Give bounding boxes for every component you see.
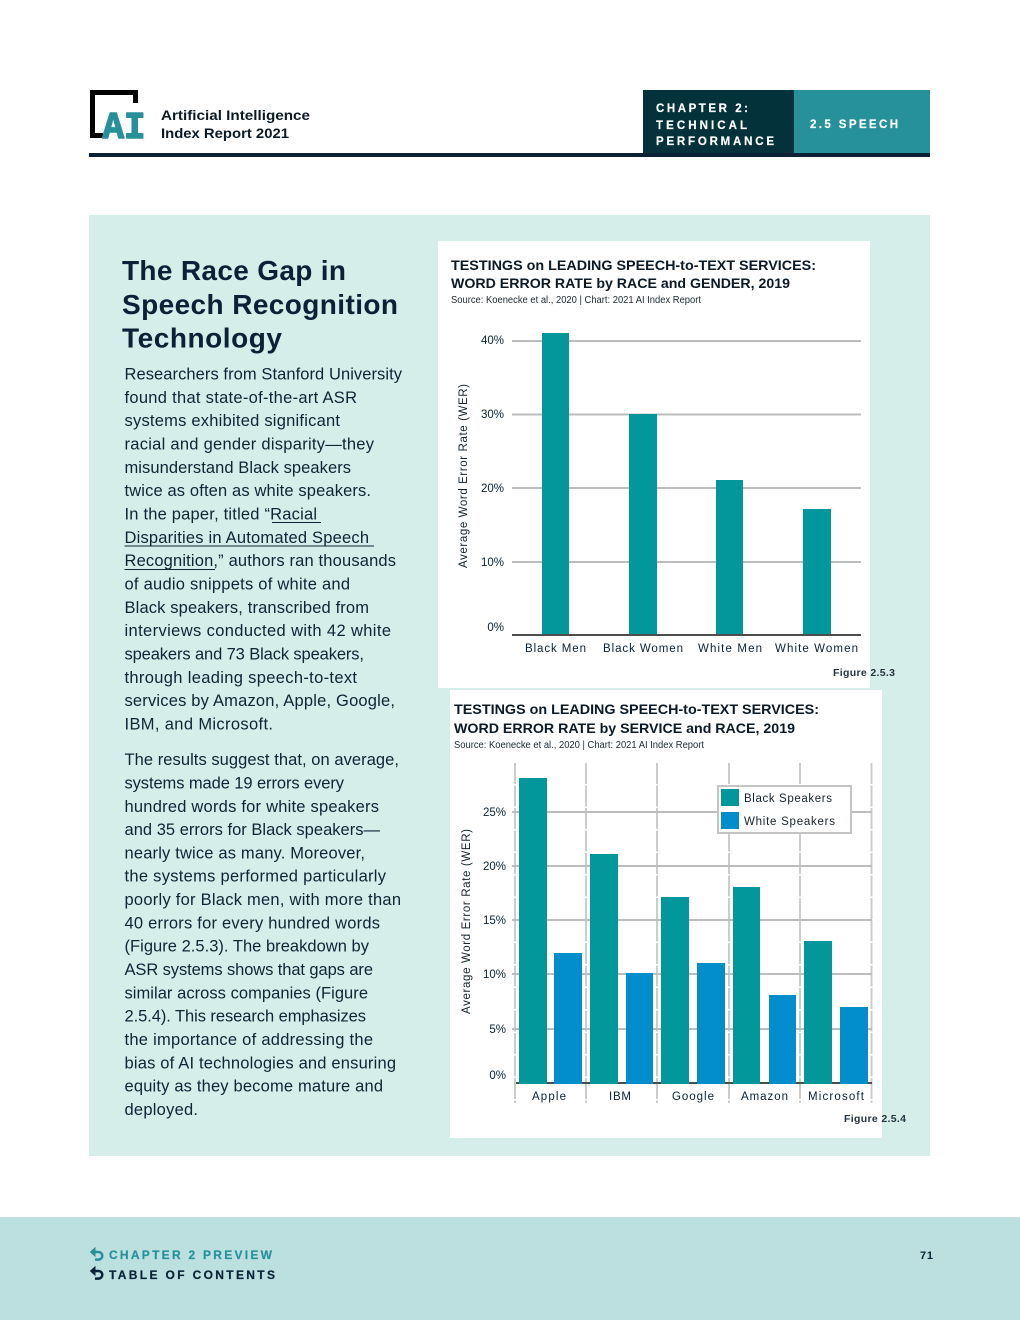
text block: second paragraph: systems made 19 errors every [124,774,345,792]
text block: second paragraph [124,751,401,1119]
text block: second paragraph: deployed. [124,1101,198,1119]
figure caption: Figure 2.5.3 [833,667,895,679]
y axis labels [483,807,506,1082]
page number: 71 [920,1250,933,1262]
text block: first paragraph: In the paper, titled “Racial [124,506,317,524]
x axis labels: Black Men [525,643,586,655]
section block [794,90,930,154]
text block: second paragraph: hundred words for white speakers [124,798,379,816]
text block: second paragraph: (Figure 2.5.3). The breakdown by [124,938,370,956]
chart title [451,258,816,306]
y axis labels: 0% [489,1070,506,1082]
chart title: Source: Koenecke et al., 2020 | Chart: 2021 AI Index Report [451,295,701,306]
bars: black speakers [519,778,832,1084]
y axis labels: 10% [483,969,506,981]
x axis labels: White Women [775,643,858,655]
y axis labels: 20% [481,483,504,495]
x axis labels: Amazon [741,1091,788,1103]
y axis labels: 5% [489,1024,506,1036]
x axis labels: Microsoft [808,1091,865,1103]
legend: Black Speakers [744,793,832,805]
chapter block [643,90,794,154]
icon: AI Index logo [92,92,146,150]
header [89,90,930,157]
text block: first paragraph: misunderstand Black speakers [124,459,351,477]
text block: first paragraph: found that state-of-the-art ASR [124,389,357,407]
chart title: Source: Koenecke et al., 2020 | Chart: 2021 AI Index Report [454,740,704,751]
text block: second paragraph: 2.5.4). This research emphasizes [124,1008,366,1026]
panel: figure 2.5.3 chart [438,241,895,688]
y axis labels: 20% [483,861,506,873]
text block: second paragraph: ASR systems shows that gaps are [124,961,373,979]
text block: second paragraph: poorly for Black men, with more than [124,891,401,909]
section block: 2.5 SPEECH [810,119,898,131]
text block: first paragraph: Researchers from Stanford University [124,366,403,384]
text block: second paragraph: similar across companies (Figure [124,984,368,1002]
chapter block: PERFORMANCE [656,136,774,148]
x axis labels: Apple [532,1091,566,1103]
heading: The Race Gap in [122,255,346,286]
bar chart: word error rate by race and gender [458,333,861,655]
y axis labels: 40% [481,335,504,347]
x axis labels: IBM [609,1091,631,1103]
heading: Technology [122,322,282,354]
chapter block: CHAPTER 2: [656,103,748,115]
footer [0,1217,1020,1320]
chapter block: TECHNICAL [656,120,747,132]
x axis labels: White Men [698,643,762,655]
panel: main content [89,215,930,1156]
x axis labels: Google [672,1091,714,1103]
x axis labels [525,643,858,655]
text block: second paragraph: the systems performed particularly [124,868,387,886]
y axis title: Average Word Error Rate (WER) [458,384,470,568]
legend: White Speakers [744,816,835,828]
y axis labels: 10% [481,557,504,569]
x axis labels: Black Women [603,643,683,655]
y axis labels: 25% [483,807,506,819]
text block: first paragraph [124,366,403,734]
text block: first paragraph: Black speakers, transcribed from [124,599,369,617]
chapter preview link: CHAPTER 2 PREVIEW [109,1248,273,1262]
bar chart: word error rate by service and race [461,763,872,1103]
icon: AI Index logo: AI [102,107,146,150]
text block: first paragraph: Recognition,” authors ran thousands [124,552,396,570]
text block: first paragraph: interviews conducted with 42 white [124,622,391,640]
text block: second paragraph: and 35 errors for Black speakers— [124,821,380,839]
text block: second paragraph: nearly twice as many. Moreover, [124,844,365,862]
text block: second paragraph: the importance of addressing the [124,1031,373,1049]
y axis labels: 0% [487,622,504,634]
y axis labels: 15% [483,915,506,927]
text block: second paragraph: 40 errors for every hundred words [124,914,380,932]
y axis labels [481,335,504,634]
heading [122,255,398,354]
text block: first paragraph: services by Amazon, Apple, Google, [124,692,395,710]
report title: Artificial Intelligence [161,107,310,123]
figure caption: Figure 2.5.4 [844,1113,906,1125]
text block: first paragraph: through leading speech-to-text [124,669,357,687]
chart title: WORD ERROR RATE by SERVICE and RACE, 2019 [454,721,795,736]
text block: first paragraph: IBM, and Microsoft. [124,716,273,734]
chart title: TESTINGS on LEADING SPEECH-to-TEXT SERVICES: [454,702,819,717]
bars [542,333,831,635]
text block: first paragraph: of audio snippets of white and [124,576,350,594]
text block: first paragraph: twice as often as white speakers. [124,482,371,500]
text block: second paragraph: The results suggest that, on average, [124,751,399,769]
text block: first paragraph: systems exhibited significant [124,412,340,430]
text block: second paragraph: equity as they become mature and [124,1078,383,1096]
text block: second paragraph: bias of AI technologies and ensuring [124,1054,396,1072]
chart title [454,702,819,751]
text block: first paragraph: Disparities in Automated Speech [124,529,369,547]
y axis labels: 30% [481,409,504,421]
y axis title: Average Word Error Rate (WER) [461,829,473,1014]
bars: white speakers [554,953,868,1084]
heading: Speech Recognition [122,289,398,320]
report title: Index Report 2021 [161,125,289,141]
report title [161,107,310,141]
chart title: TESTINGS on LEADING SPEECH-to-TEXT SERVICES: [451,258,816,273]
text block: first paragraph: speakers and 73 Black speakers, [124,646,364,664]
x axis labels [532,1091,865,1103]
text block: first paragraph: racial and gender disparity—they [124,436,375,454]
legend [718,786,851,833]
panel: figure 2.5.4 chart [450,690,906,1138]
table of contents link: TABLE OF CONTENTS [109,1268,275,1282]
chart title: WORD ERROR RATE by RACE and GENDER, 2019 [451,276,790,291]
